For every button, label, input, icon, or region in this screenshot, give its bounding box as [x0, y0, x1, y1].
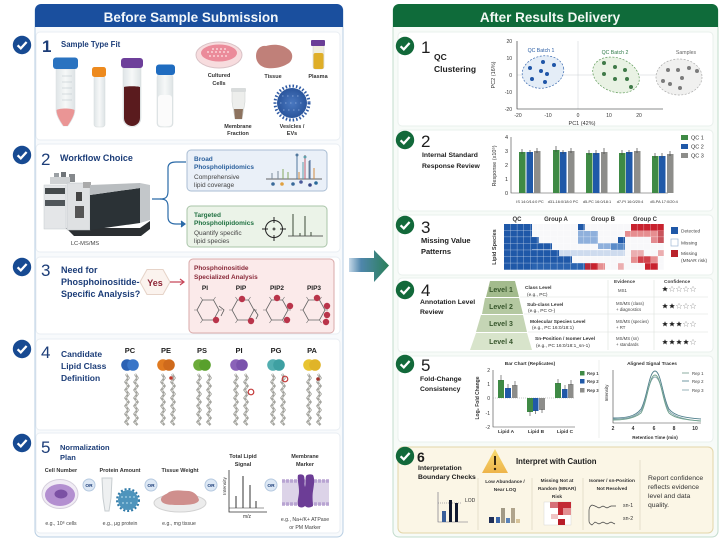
icon: target	[262, 217, 286, 241]
chart: LOD	[438, 492, 476, 522]
bar chart: response: Response (x10⁵)	[491, 145, 498, 187]
evidence column: MS/MS (class)	[616, 301, 644, 306]
icon: warning	[482, 449, 508, 473]
heatmap	[492, 217, 708, 270]
label: cultured cells: Cells	[212, 81, 226, 87]
dividers	[478, 460, 640, 530]
PI structure	[194, 297, 224, 323]
lipid PA	[303, 346, 321, 425]
pyramid: levels	[470, 281, 532, 350]
box: broad phospholipidomics	[187, 150, 327, 191]
annotation descriptions: Sn-Position / Isomer Level	[535, 336, 595, 342]
box: phosphoinositide analysis: PIP2	[270, 285, 284, 292]
heatmap: Group B	[591, 217, 616, 223]
title: Interpretation	[418, 465, 462, 472]
icon: membrane fraction tube	[231, 88, 246, 119]
arrow: before to after	[349, 250, 389, 282]
OR badge: OR	[267, 483, 275, 489]
lipid PI: PI	[235, 346, 243, 355]
heading: before sample submission	[35, 4, 343, 27]
bar chart: response: IS 14:0/14:0 PC	[516, 199, 544, 204]
lipid PG	[267, 346, 288, 425]
icon: check 1	[13, 36, 31, 54]
card: candidate lipid class	[13, 339, 340, 430]
pyramid: levels: Level 2	[489, 304, 513, 311]
legend: Missing	[681, 240, 698, 246]
annotation descriptions: Sub-class Level	[527, 302, 563, 308]
number 5: 5	[421, 356, 430, 375]
column: low abundance: Low Abundance /	[485, 479, 525, 485]
heatmap: Group C	[633, 217, 658, 223]
icon: check 2	[13, 146, 31, 164]
legend	[681, 135, 704, 160]
card: workflow choice	[13, 144, 340, 252]
PCA scatter chart: 0	[577, 113, 580, 119]
annotation descriptions	[525, 285, 595, 349]
evidence column	[614, 279, 649, 347]
lipid PA: PA	[307, 346, 318, 355]
chart: aligned signal traces: 8	[673, 426, 676, 432]
panel: before sample submission	[13, 4, 343, 537]
label: LC-MS/MS: LC-MS/MS	[71, 241, 99, 247]
arrows: workflow branches	[152, 162, 186, 227]
bar chart: response: 3	[505, 149, 508, 155]
captions: e.g., Na+/K+ ATPase	[281, 517, 329, 523]
OR badge	[205, 479, 217, 491]
PCA scatter chart: 10	[606, 113, 612, 119]
number 1: 1	[421, 38, 430, 57]
PCA scatter chart: -20	[514, 113, 522, 119]
card: interpretation boundary checks	[396, 447, 713, 533]
column: isomer	[589, 478, 635, 525]
chart: aligned signal traces: 10	[692, 426, 698, 432]
annotation descriptions: Molecular Species Level	[530, 319, 585, 325]
chart: fold change bars: 2	[487, 368, 490, 374]
column: isomer: sn-2	[623, 516, 633, 522]
number 3: 3	[421, 218, 430, 237]
column: low abundance: Near LOQ	[494, 487, 516, 493]
box: targeted phospholipidomics	[187, 206, 327, 247]
cluster: samples: Samples	[676, 50, 696, 56]
chart: LOD: LOD	[465, 498, 476, 504]
icon: cultured cells dish	[196, 42, 242, 68]
labels: Signal	[235, 462, 252, 468]
box: phosphoinositide analysis: PIP	[236, 285, 247, 292]
label: vesicles: EVs	[287, 131, 297, 137]
table lines	[520, 280, 708, 350]
PCA scatter chart: PC2 (16%)	[491, 61, 497, 88]
bar chart: response: d7-PI 16:0/20:4	[617, 199, 644, 204]
captions: e.g., 10⁶ cells	[45, 521, 77, 527]
box: broad phospholipidomics: Comprehensive	[194, 174, 240, 181]
PCA scatter chart: -10	[544, 113, 552, 119]
evidence column: + RT	[616, 325, 626, 330]
legend: Missing	[681, 251, 698, 257]
box: targeted phospholipidomics: Quantify specific	[194, 230, 242, 237]
title: Annotation Level	[420, 299, 475, 306]
icon: check 5	[396, 355, 414, 373]
bar chart: response: 2	[505, 163, 508, 169]
title: Phosphoinositide-	[61, 277, 140, 287]
card: phosphoinositide need	[13, 257, 340, 334]
legend: QC 3	[691, 154, 704, 160]
legend: (MNAR risk)	[681, 258, 708, 264]
title: Plan	[60, 453, 76, 462]
chart: fold change bars: Log₂ Fold Change	[475, 376, 481, 420]
number 5: 5	[41, 438, 50, 457]
chart: fold change bars: 1	[487, 382, 490, 388]
chart: fold change bars: Lipid B	[528, 429, 545, 435]
lipid PS	[193, 346, 211, 425]
lipid PS: PS	[197, 346, 207, 355]
evidence column: Evidence	[614, 279, 635, 285]
title: Fold-Change	[420, 376, 462, 383]
column: isomer: sn-1	[623, 503, 633, 509]
number 2: 2	[421, 132, 430, 151]
labels: Total Lipid	[229, 454, 257, 460]
legend: Rep 2	[587, 379, 599, 384]
box: broad phospholipidomics: lipid coverage	[194, 182, 234, 189]
title: Lipid Class	[61, 361, 107, 371]
PIP2 structure	[263, 295, 293, 323]
box: broad phospholipidomics: Broad	[194, 156, 213, 163]
number 3: 3	[41, 261, 50, 280]
icon: protein tube and structure	[102, 478, 139, 511]
PCA scatter chart: -10	[505, 90, 512, 96]
legend: Detected	[681, 228, 701, 234]
cluster: QC batch 2: QC Batch 2	[602, 50, 629, 56]
PCA scatter chart: -20	[505, 107, 512, 113]
heatmap: QC	[512, 217, 522, 223]
box: phosphoinositide analysis	[189, 259, 334, 333]
title: Specific Analysis?	[61, 289, 140, 299]
lipid PC: PC	[125, 346, 136, 355]
OR badge: OR	[147, 483, 155, 489]
icon: check 3	[13, 258, 31, 276]
cluster: QC batch 2	[588, 50, 644, 99]
legend	[671, 227, 708, 264]
column: MNAR: Risk	[552, 494, 562, 500]
title: Sample Type Fit	[61, 40, 121, 49]
evidence column: MS/MS (species)	[616, 319, 649, 324]
legend	[580, 371, 599, 393]
captions: e.g., μg protein	[103, 521, 137, 527]
confidence column	[662, 279, 696, 345]
column: isomer: Isomer / sn-Position	[589, 478, 635, 484]
title: Workflow Choice	[60, 153, 133, 163]
icon: check 6	[396, 447, 414, 465]
title: Boundary Checks	[418, 474, 476, 481]
card: sample type fit	[13, 32, 340, 140]
card: QC clustering	[396, 32, 713, 127]
OR badge: OR	[207, 483, 215, 489]
box: broad phospholipidomics: Phospholipidomics	[194, 164, 254, 171]
PCA scatter chart: 10	[506, 56, 512, 62]
confidence column: Confidence	[664, 279, 690, 285]
cluster: QC batch 1	[519, 48, 567, 92]
bar chart: response: 1	[505, 177, 508, 183]
chart: aligned signal traces: 6	[653, 426, 656, 432]
OR badge	[145, 479, 157, 491]
heatmap: Group A	[544, 217, 569, 223]
title: Consistency	[420, 386, 461, 393]
box: targeted phospholipidomics: lipid species	[194, 238, 230, 245]
cluster: samples	[656, 50, 702, 95]
label: tissue: Tissue	[264, 74, 282, 80]
chart: fold change bars	[475, 361, 599, 435]
OR badge	[83, 479, 95, 491]
PIP3 structure	[300, 295, 330, 325]
number 4: 4	[41, 343, 50, 362]
icon: check 1	[396, 37, 414, 55]
chart: total lipid signal	[222, 470, 267, 520]
captions: e.g., mg tissue	[162, 521, 196, 527]
instrument: LC-MS/MS	[44, 172, 150, 236]
chart: aligned signal traces: Retention Time (min)	[632, 435, 678, 440]
card: internal standard	[396, 130, 713, 211]
legend: Rep 3	[692, 388, 704, 393]
mini peaks	[288, 235, 323, 237]
label: membrane fraction: Fraction	[227, 131, 249, 137]
icon: membrane marker	[282, 474, 329, 508]
annotation descriptions: (e.g., PC O-)	[528, 308, 556, 314]
label: cultured cells: Cultured	[208, 73, 230, 79]
column: MNAR	[538, 478, 576, 525]
heatmap: Lipid Species	[492, 229, 498, 265]
box: targeted phospholipidomics: Targeted	[194, 212, 221, 219]
legend: Rep 3	[587, 388, 599, 393]
evidence column: MS1	[618, 288, 627, 293]
lipid PE	[157, 346, 175, 425]
legend: Rep 1	[587, 371, 599, 376]
cluster: QC batch 1: QC Batch 1	[528, 48, 555, 54]
label: plasma: Plasma	[308, 74, 329, 80]
box: phosphoinositide analysis: Specialized Analysis	[194, 274, 258, 281]
captions: or PM Marker	[289, 525, 321, 531]
icon: tissue on plate	[154, 490, 206, 512]
arrow: yes to analysis	[170, 279, 184, 285]
legend: QC 2	[691, 144, 704, 150]
chart: aligned signal traces	[604, 361, 704, 440]
hexagon: yes: Yes	[147, 278, 163, 288]
lipid PE: PE	[161, 346, 171, 355]
card: fold-change consistency	[396, 355, 713, 442]
chart: total lipid signal: m/z	[243, 514, 252, 520]
icon: vesicle	[275, 86, 309, 120]
evidence column: + standards	[616, 342, 639, 347]
annotation descriptions: Class Level	[525, 285, 551, 291]
callout: report confidence: reflects evidence	[648, 484, 699, 491]
title: Missing Value	[421, 236, 471, 245]
number 4: 4	[421, 281, 430, 300]
callout: report confidence: Report confidence	[648, 475, 703, 482]
chart: fold change bars: Bar Chart (Replicates)	[505, 361, 556, 367]
title: Definition	[61, 373, 100, 383]
PCA scatter chart: PC1 (42%)	[569, 121, 596, 127]
icon: check 5	[13, 434, 31, 452]
legend	[682, 371, 704, 393]
title: Internal Standard	[422, 152, 478, 159]
icon: plasma tube	[311, 40, 325, 69]
PCA scatter chart	[491, 39, 702, 127]
OR badge: OR	[85, 483, 93, 489]
icon: tissue	[256, 45, 292, 68]
lipid PG: PG	[271, 346, 282, 355]
lipid PC	[121, 346, 139, 425]
bar chart: response: d5-PA 17:0/20:4	[650, 199, 679, 204]
column: low abundance	[485, 479, 525, 523]
icon: check 4	[13, 340, 31, 358]
callout: report confidence: level and data	[648, 493, 691, 500]
bar chart: response	[491, 135, 704, 204]
title: Patterns	[421, 247, 451, 256]
bar chart: response: d31-16:0/18:0 PC	[548, 199, 578, 204]
labels: Cell Number	[45, 468, 78, 474]
labels: Marker	[296, 462, 315, 468]
hexagon: yes	[140, 270, 170, 294]
sample tubes	[53, 58, 175, 127]
column: MNAR: Random (MNAR)	[538, 486, 576, 492]
box: phosphoinositide analysis: PIP3	[307, 285, 321, 292]
callout: report confidence: quality.	[648, 502, 669, 509]
mini spectrum	[266, 154, 322, 187]
icon: check 4	[396, 281, 414, 299]
legend: Rep 2	[692, 379, 704, 384]
chart: fold change bars: Lipid C	[557, 429, 574, 435]
box: phosphoinositide analysis: Phosphoinositide	[194, 265, 249, 272]
heading: after results delivery: After Results Delivery	[480, 10, 621, 25]
icon: cell	[42, 480, 78, 508]
labels: Protein Amount	[99, 468, 141, 474]
chart: aligned signal traces: Aligned Signal Traces	[627, 361, 677, 367]
pyramid: levels: Level 1	[489, 287, 513, 294]
title: Response Review	[422, 163, 481, 170]
pyramid: levels: Level 4	[489, 339, 513, 346]
title: QC	[434, 52, 447, 62]
OR badge	[265, 479, 277, 491]
chart: fold change bars: -1	[486, 411, 490, 417]
chart: total lipid signal: Intensity	[222, 476, 228, 495]
evidence column: MS/MS (sn)	[616, 336, 639, 341]
card: normalization plan	[13, 433, 340, 533]
labels: Tissue Weight	[161, 468, 199, 474]
icon: check 2	[396, 131, 414, 149]
pyramid: levels: Level 3	[489, 321, 513, 328]
number 1: 1	[42, 37, 51, 56]
legend: Rep 1	[692, 371, 704, 376]
title: Normalization	[60, 443, 110, 452]
PIP structure	[229, 296, 258, 324]
chart: aligned signal traces: 4	[632, 426, 635, 432]
box: targeted phospholipidomics: Phospholipidomics	[194, 220, 254, 227]
chart: aligned signal traces: Intensity	[604, 384, 609, 401]
title: Clustering	[434, 64, 476, 74]
chart: fold change bars: -2	[486, 425, 490, 431]
annotation descriptions: (e.g., PC 16:0/18:1)	[532, 325, 574, 331]
lipid PI	[230, 346, 254, 425]
card: missing value patterns	[396, 215, 713, 275]
label: vesicles: Vesicles /	[280, 124, 305, 130]
label: membrane fraction: Membrane	[224, 124, 252, 130]
title: Candidate	[61, 349, 102, 359]
bar chart: response: 4	[505, 135, 508, 141]
heading: after results delivery	[393, 4, 718, 27]
number 6: 6	[417, 449, 425, 465]
chart: aligned signal traces: 2	[612, 426, 615, 432]
evidence column: + diagnostics	[616, 307, 641, 312]
legend: QC 1	[691, 136, 704, 142]
PCA scatter chart: 0	[509, 73, 512, 79]
bar chart: response: 0	[505, 191, 508, 197]
panel: after results delivery	[393, 4, 718, 537]
heading: before sample submission: Before Sample Submission	[104, 10, 278, 25]
bar chart: response: d5-PC 16:0/18:1	[583, 199, 611, 204]
PCA scatter chart: 20	[506, 39, 512, 45]
chart: fold change bars: 0	[487, 396, 490, 402]
PCA scatter chart: 20	[636, 113, 642, 119]
annotation descriptions: (e.g., PC 16:0/18:1_sn-1)	[536, 343, 590, 349]
number 2: 2	[41, 150, 50, 169]
heading: interpret with caution: Interpret with Caution	[516, 457, 597, 466]
chart: fold change bars: Lipid A	[498, 429, 515, 435]
title: Need for	[61, 265, 98, 275]
column: isomer: Not Resolved	[597, 486, 627, 492]
box: phosphoinositide analysis: PI	[202, 285, 208, 292]
icon: check 3	[396, 216, 414, 234]
labels: Membrane	[291, 454, 319, 460]
title: Review	[420, 309, 444, 316]
column: MNAR: Missing Not at	[541, 478, 574, 484]
annotation descriptions: (e.g., PC)	[527, 292, 548, 298]
card: annotation level review	[396, 278, 713, 352]
